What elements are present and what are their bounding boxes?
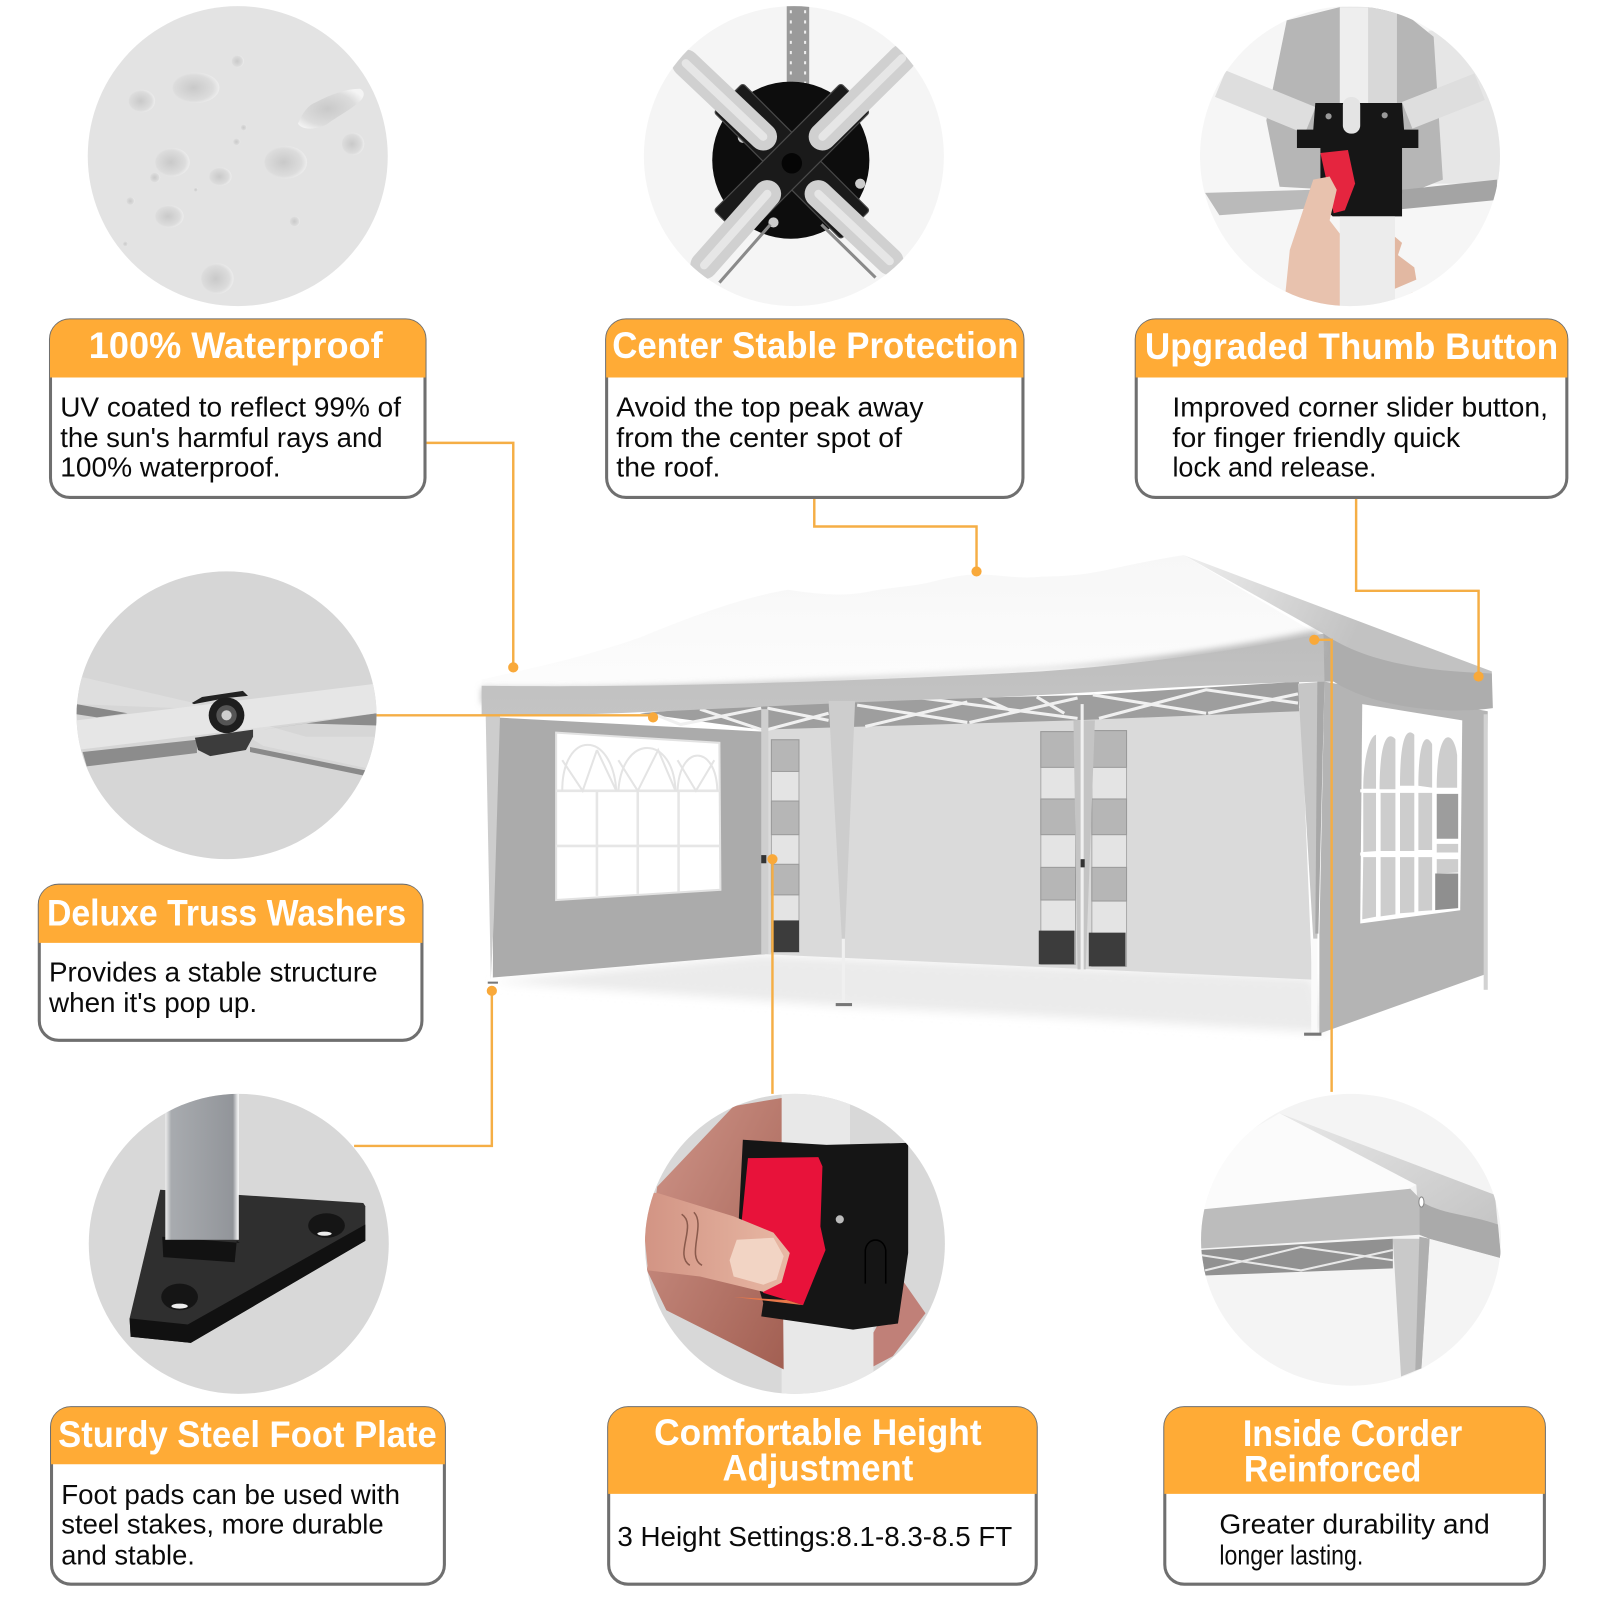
- panel: upgraded thumb button: [1136, 319, 1567, 497]
- description: [48, 957, 378, 1018]
- connector lines: [354, 443, 1484, 1146]
- panel: deluxe truss washers: [39, 885, 422, 1040]
- canopy right slope: [1184, 555, 1492, 694]
- description: when it's pop up.: [48, 987, 257, 1018]
- heading: Upgraded Thumb Button: [1145, 326, 1558, 367]
- detail circle: height adjustment button: [638, 1087, 954, 1403]
- heading: Deluxe Truss Washers: [47, 893, 406, 934]
- description: [61, 1479, 400, 1570]
- description: 100% waterproof.: [60, 452, 281, 483]
- heading: Reinforced: [1244, 1449, 1421, 1490]
- heading: [1243, 1413, 1462, 1490]
- panel: inside corder reinforced: [1164, 1407, 1545, 1584]
- description: from the center spot of: [616, 422, 902, 453]
- doorway mesh panels: [771, 731, 1127, 966]
- description: Greater durability and: [1219, 1509, 1490, 1540]
- heading: Comfortable Height: [654, 1412, 982, 1453]
- description: Improved corner slider button,: [1172, 391, 1548, 422]
- heading: [654, 1412, 982, 1489]
- description: Provides a stable structure: [49, 957, 378, 988]
- description: for finger friendly quick: [1172, 422, 1460, 453]
- description: steel stakes, more durable: [61, 1509, 384, 1540]
- panel: center stable protection: [606, 319, 1023, 497]
- heading: Inside Corder: [1243, 1413, 1462, 1454]
- roof truss: [640, 682, 1299, 730]
- detail circle: truss washer: [71, 566, 383, 867]
- heading: Sturdy Steel Foot Plate: [58, 1414, 437, 1455]
- description: the roof.: [616, 452, 720, 483]
- description: [1219, 1509, 1490, 1570]
- ground shadow: [492, 955, 1327, 1033]
- left wall window: [556, 733, 720, 900]
- description: longer lasting.: [1219, 1539, 1363, 1570]
- description: UV coated to reflect 99% of: [60, 391, 401, 422]
- description: 3 Height Settings:8.1-8.3-8.5 FT: [617, 1521, 1012, 1552]
- right wall: [1319, 682, 1488, 1034]
- front valance: [482, 634, 1324, 716]
- left wall: [493, 717, 765, 978]
- right valance: [1323, 634, 1493, 710]
- description: [60, 391, 401, 483]
- description: the sun's harmful rays and: [60, 422, 383, 453]
- heading: 100% Waterproof: [89, 325, 383, 366]
- description: and stable.: [61, 1539, 195, 1570]
- panel: comfortable height adjustment: [608, 1407, 1037, 1584]
- panel: waterproof: [50, 319, 426, 497]
- detail circle: water droplets: [82, 0, 398, 316]
- rear poles: [761, 704, 1488, 990]
- description: Foot pads can be used with: [61, 1479, 400, 1510]
- heading: Center Stable Protection: [612, 325, 1018, 366]
- main tent illustration: [482, 555, 1493, 1036]
- front legs: [486, 682, 1324, 1036]
- description: Avoid the top peak away: [616, 391, 924, 422]
- panel: sturdy steel foot plate: [51, 1407, 445, 1584]
- detail circle: thumb button: [1200, 6, 1500, 306]
- detail circle: center hub: [644, 6, 944, 306]
- canopy top: [482, 555, 1323, 704]
- description: [616, 391, 924, 483]
- description: [1172, 391, 1548, 483]
- description: lock and release.: [1172, 452, 1377, 483]
- detail circle: inside corner: [1194, 1087, 1510, 1393]
- right wall window: [1360, 704, 1462, 923]
- canopy soft edge: [482, 630, 1322, 704]
- heading: Adjustment: [722, 1448, 913, 1489]
- detail circle: foot plate: [82, 1087, 398, 1403]
- back wall: [763, 708, 1312, 980]
